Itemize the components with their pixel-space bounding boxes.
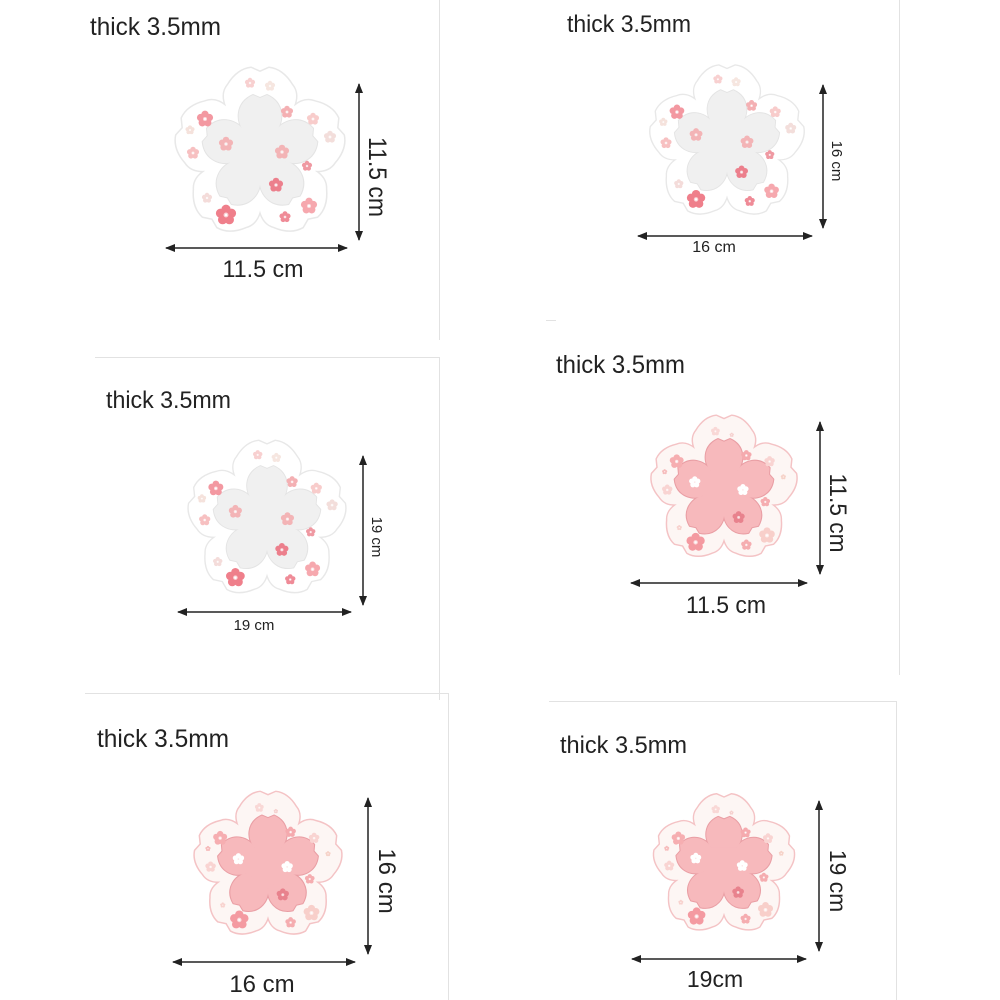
label: width: 16 cm [692, 239, 736, 256]
label: height: 19 cm [825, 850, 851, 912]
panel: pink coaster 11.5 cm [556, 351, 851, 619]
icon: white flower coaster [643, 66, 811, 225]
icon: white flower coaster [181, 441, 353, 604]
panel: white coaster 16 cm [567, 11, 845, 256]
arrow: width [173, 961, 355, 963]
arrow: height [819, 422, 821, 574]
heading: thickness: thick 3.5mm [90, 13, 221, 41]
arrow: width [178, 611, 351, 613]
arrow: height [358, 84, 360, 240]
heading: thickness: thick 3.5mm [556, 351, 685, 379]
arrow: width [166, 247, 347, 249]
label: width: 19cm [687, 966, 743, 992]
panel: pink coaster 16 cm [97, 725, 400, 998]
panel: pink coaster 19 cm [560, 732, 851, 992]
label: height: 16 cm [373, 848, 400, 914]
arrow: height [362, 456, 364, 605]
arrow: height [367, 798, 369, 954]
heading: thickness: thick 3.5mm [567, 11, 691, 38]
label: width: 19 cm [234, 617, 274, 634]
icon: pink flower coaster [645, 416, 803, 566]
arrow: width [632, 958, 806, 960]
arrow: width [638, 235, 812, 237]
icon: pink flower coaster [188, 792, 348, 944]
label: width: 11.5 cm [686, 592, 766, 619]
panel: white coaster 19 cm [106, 387, 385, 634]
label: width: 11.5 cm [222, 256, 304, 283]
label: height: 11.5 cm [363, 137, 391, 217]
icon: white flower coaster [168, 68, 352, 243]
icon: pink flower coaster [648, 794, 800, 940]
label: width: 16 cm [229, 971, 295, 998]
label: height: 11.5 cm [824, 474, 851, 552]
panel: white coaster 11.5 cm [90, 13, 391, 283]
label: height: 16 cm [828, 141, 845, 181]
heading: thickness: thick 3.5mm [97, 725, 229, 753]
heading: thickness: thick 3.5mm [106, 387, 231, 414]
arrow: width [631, 582, 807, 584]
arrow: height [818, 801, 820, 951]
arrow: height [822, 85, 824, 228]
heading: thickness: thick 3.5mm [560, 732, 687, 759]
label: height: 19 cm [368, 517, 385, 557]
